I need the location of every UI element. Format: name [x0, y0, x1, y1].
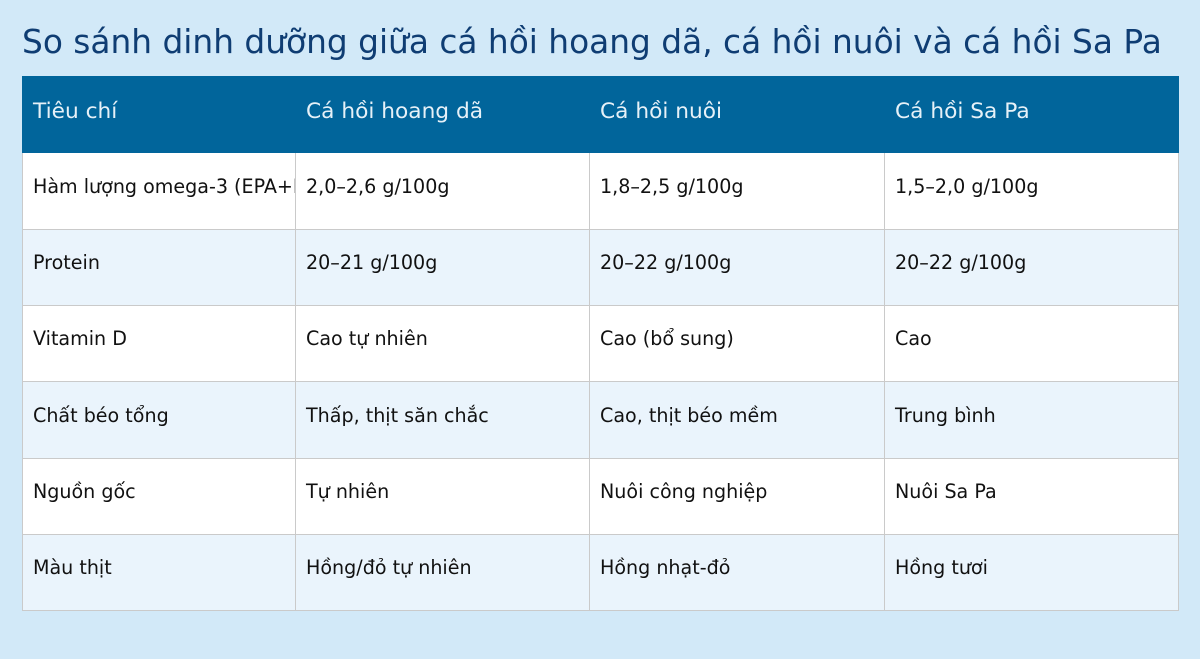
row: total fat: Chất béo tổng — [33, 404, 169, 426]
row: origin: Nuôi công nghiệp — [600, 480, 767, 503]
comparison table — [22, 76, 1179, 611]
row: protein — [22, 230, 1179, 305]
row: origin: Nuôi Sa Pa — [895, 480, 997, 503]
row: protein: Protein — [33, 251, 100, 274]
row: total fat: Thấp, thịt săn chắc — [306, 404, 489, 426]
row: vitamin D: Cao tự nhiên — [306, 327, 428, 350]
row: omega-3: 1,8–2,5 g/100g — [600, 174, 743, 198]
row: protein: 20–22 g/100g — [600, 251, 731, 274]
row: flesh colour — [22, 535, 1179, 611]
row: omega-3: 1,5–2,0 g/100g — [895, 174, 1038, 198]
row: origin: Tự nhiên — [306, 480, 389, 503]
row: vitamin D: Vitamin D — [33, 327, 127, 350]
row: origin: Nguồn gốc — [33, 480, 136, 503]
row: total fat: Cao, thịt béo mềm — [600, 404, 778, 426]
title: So sánh dinh dưỡng giữa cá hồi hoang dã, cá hồi nuôi và cá hồi Sa Pa — [22, 22, 1162, 60]
table header row — [22, 76, 1179, 153]
row: protein: 20–22 g/100g — [895, 251, 1026, 274]
row: flesh colour: Hồng nhạt-đỏ — [600, 556, 730, 579]
table header row: Cá hồi hoang dã — [306, 99, 483, 124]
row: total fat — [22, 382, 1179, 458]
row: protein: 20–21 g/100g — [306, 251, 437, 274]
row: flesh colour: Hồng/đỏ tự nhiên — [306, 556, 472, 579]
table header row: Cá hồi nuôi — [600, 99, 722, 124]
row: vitamin D — [22, 306, 1179, 381]
row: omega-3 — [22, 153, 1179, 229]
table header row: Tiêu chí — [33, 99, 117, 124]
row: flesh colour: Màu thịt — [33, 556, 112, 579]
row: vitamin D: Cao (bổ sung) — [600, 327, 734, 350]
table header row: Cá hồi Sa Pa — [895, 99, 1030, 124]
row: omega-3: 2,0–2,6 g/100g — [306, 174, 449, 198]
row: flesh colour: Hồng tươi — [895, 556, 988, 579]
row: origin — [22, 459, 1179, 534]
row: total fat: Trung bình — [895, 404, 996, 426]
row: vitamin D: Cao — [895, 327, 932, 350]
